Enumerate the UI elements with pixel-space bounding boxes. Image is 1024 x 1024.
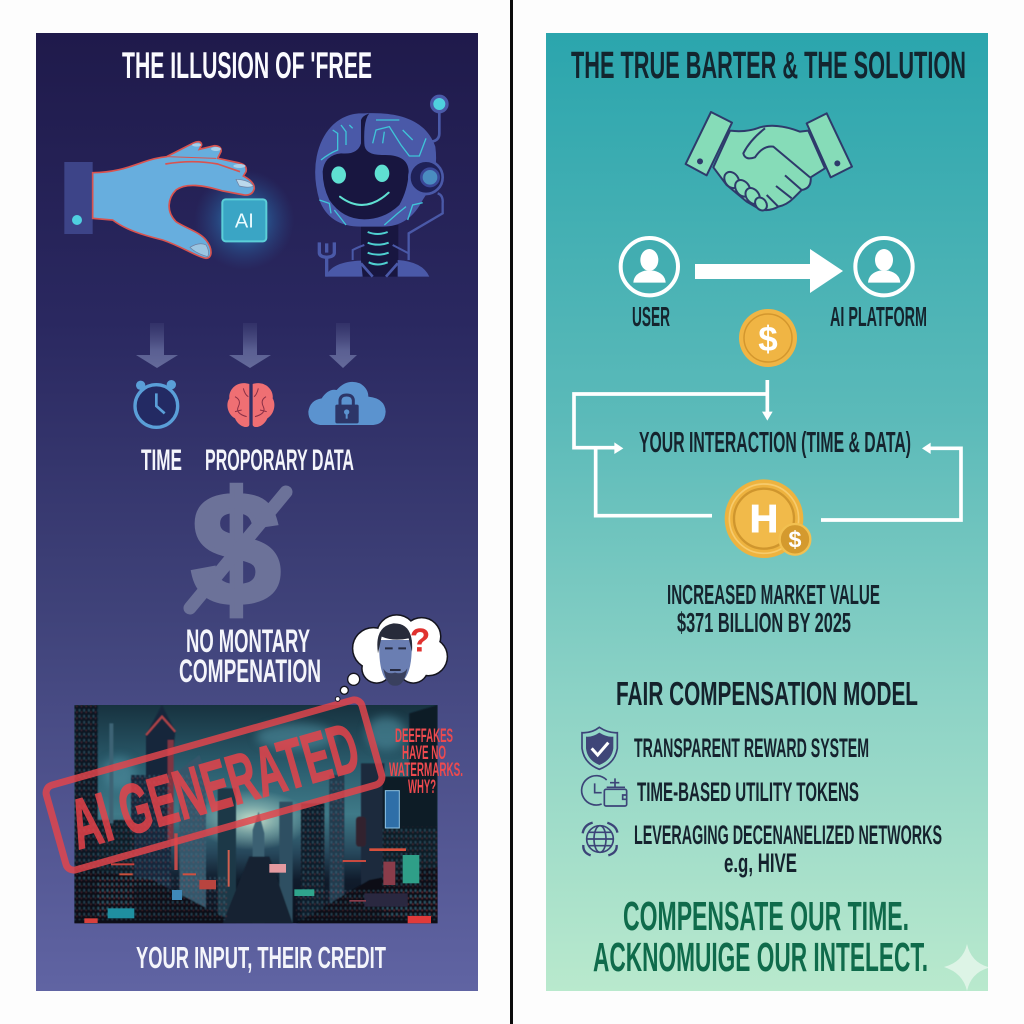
panel: the illusion of free <box>36 33 478 991</box>
label: AI platform: AI PLATFORM <box>830 301 927 332</box>
center divider <box>510 0 513 1024</box>
icon: thought bubble with face: ? <box>410 623 430 660</box>
icon: sparkle <box>944 944 988 991</box>
icon: user avatar <box>621 238 678 295</box>
text: increased market value: $371 BILLION BY 2025 <box>677 607 851 638</box>
panel: the true barter and the solution: USER <box>632 301 670 332</box>
icon: dollar coin: $ <box>758 320 778 359</box>
icon: hive coin with dollar <box>725 479 810 558</box>
label: no montary compensation <box>179 623 321 689</box>
icon: AI platform avatar <box>855 238 913 295</box>
icon: globe network <box>583 823 617 855</box>
text: deepfakes have no watermarks: HAVE NO <box>402 743 446 764</box>
arrow: user to AI platform <box>695 249 843 293</box>
icon: hive coin with dollar: $ <box>789 527 802 553</box>
diagram: flow arrows loop <box>574 380 961 520</box>
label: proporary data: PROPORARY DATA <box>205 444 354 477</box>
icon: shield check <box>582 727 617 769</box>
icon: handshake <box>686 112 852 213</box>
icon: hand picking AI chip: AI <box>235 210 254 232</box>
stamp: AI generated: AI GENERATED <box>61 708 367 864</box>
label: no montary compensation: NO MONTARY <box>186 623 310 659</box>
icon: thought bubble with face <box>335 616 447 701</box>
text: deepfakes have no watermarks <box>389 726 463 798</box>
icon: cloud with padlock <box>308 382 386 425</box>
icon: hand picking AI chip <box>64 142 294 270</box>
icon: clock and wallet <box>582 776 627 806</box>
title: the illusion of free: THE ILLUSION OF 'FREE <box>122 45 372 86</box>
text: leveraging decentralized networks <box>634 820 942 878</box>
icon: hive coin with dollar: H <box>750 497 778 541</box>
text: deepfakes have no watermarks: DEEFFAKES <box>395 726 453 747</box>
icon: alarm clock <box>135 380 178 427</box>
text: deepfakes have no watermarks: WHY? <box>408 777 436 798</box>
icon: smiling robot <box>315 96 447 277</box>
call to action <box>593 893 928 980</box>
text: increased market value <box>667 579 880 638</box>
text: deepfakes have no watermarks: WATERMARKS. <box>389 760 463 781</box>
icon: brain <box>227 383 274 427</box>
icon: crossed-out dollar sign: $ <box>192 459 280 638</box>
stamp: AI generated <box>44 698 384 872</box>
caption: your input, their credit: YOUR INPUT, THEIR CREDIT <box>136 940 386 975</box>
text: time-based utility tokens: TIME-BASED UTILITY TOKENS <box>637 777 859 807</box>
panel: the true barter and the solution <box>546 33 988 991</box>
label: time: TIME <box>141 444 182 477</box>
image: AI generated cyberpunk city <box>74 705 438 923</box>
label: no montary compensation: COMPENATION <box>179 653 321 689</box>
arrows: three down arrows <box>136 323 357 368</box>
icon: dollar coin <box>739 309 797 367</box>
text: leveraging decentralized networks: e.g, HIVE <box>724 848 797 878</box>
